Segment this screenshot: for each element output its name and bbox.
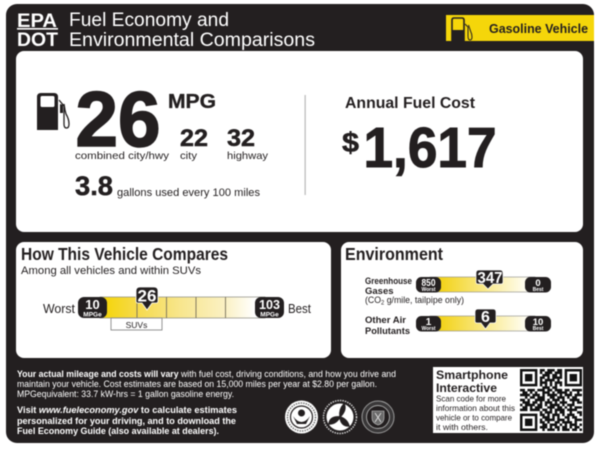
panel: how this vehicle compares xyxy=(16,242,331,358)
worst cap xyxy=(416,316,441,332)
gallons per 100 miles: gallons used every 100 miles xyxy=(117,187,261,199)
best value cap xyxy=(255,297,284,318)
combined MPG xyxy=(75,75,216,163)
footer disclaimer text: MPGequivalent: 33.7 kW-hrs = 1 gallon gasoline energy. xyxy=(17,389,234,399)
greenhouse gas label: Greenhouse xyxy=(365,276,412,287)
best cap: 0 xyxy=(535,278,541,289)
best label: Best xyxy=(288,301,311,316)
EPA DOT logo: DOT xyxy=(17,29,58,51)
EPA DOT logo: EPA xyxy=(17,10,57,32)
footer website text: Fuel Economy Guide (also available at dealers). xyxy=(17,426,219,437)
instructions xyxy=(436,394,516,432)
heading: Smartphone xyxy=(436,368,508,382)
greenhouse gas rating bar xyxy=(416,270,551,293)
annual fuel cost: $ xyxy=(342,127,359,158)
gallons per 100 miles xyxy=(75,171,261,201)
marker xyxy=(136,286,158,310)
worst cap: Worst xyxy=(421,326,436,332)
other air pollutants label xyxy=(365,315,410,337)
best cap xyxy=(525,316,551,332)
other air pollutants label: Pollutants xyxy=(365,326,410,337)
other air pollutants label: Other Air xyxy=(365,315,406,326)
smartphone interactive box xyxy=(433,367,583,433)
worst label: Worst xyxy=(43,301,75,316)
panel: environment xyxy=(341,242,583,358)
icon: EPA seal xyxy=(285,400,318,434)
instructions: information about this xyxy=(436,403,516,413)
best cap: 10 xyxy=(533,317,543,328)
instructions: Scan code for more xyxy=(436,394,506,404)
SUVs range box xyxy=(111,318,162,330)
footer disclaimer text: Your actual mileage and costs will vary with fuel cost, driving conditions, and how you drive and xyxy=(17,369,396,379)
marker: 347 xyxy=(478,270,503,287)
marker: 26 xyxy=(138,286,156,306)
footer website text: Visit www.fueleconomy.gov to calculate estimates xyxy=(17,405,237,416)
highway MPG xyxy=(227,125,269,162)
title: Fuel Economy and xyxy=(69,10,229,31)
greenhouse gas label: g/mile, tailpipe only) xyxy=(384,295,464,305)
combined MPG: 26 xyxy=(76,75,160,163)
greenhouse gas label: Gases xyxy=(365,286,394,297)
footer website text xyxy=(17,405,237,437)
combined MPG: MPG xyxy=(168,91,216,113)
instructions: vehicle or to compare xyxy=(436,412,512,422)
marker: 6 xyxy=(481,309,490,326)
icon: fuel pump xyxy=(37,93,69,130)
best cap: Best xyxy=(533,326,544,332)
subheading: Among all vehicles and within SUVs xyxy=(21,265,202,277)
heading: Interactive xyxy=(436,381,497,395)
greenhouse gas label: 2 xyxy=(381,300,385,306)
combined MPG: combined city/hwy xyxy=(75,150,170,162)
best value cap: 103 xyxy=(259,297,280,312)
comparison bar xyxy=(78,286,284,318)
greenhouse gas label: (CO xyxy=(365,295,382,305)
footer website text: personalized for your driving, and to download the xyxy=(17,416,236,427)
instructions: it with others. xyxy=(436,422,488,432)
best cap: Best xyxy=(533,287,544,293)
highway MPG: highway xyxy=(227,150,269,162)
title: Environmental Comparisons xyxy=(69,30,315,51)
annual fuel cost xyxy=(342,95,496,180)
EPA DOT logo xyxy=(17,10,58,51)
icon: DOE seal xyxy=(362,401,394,433)
SUVs range box: SUVs xyxy=(126,320,147,330)
vehicle type tag: Gasoline Vehicle xyxy=(489,22,588,36)
panel: fuel economy xyxy=(16,51,583,232)
worst cap: Worst xyxy=(421,287,436,293)
worst cap: 850 xyxy=(422,278,436,289)
annual fuel cost: Annual Fuel Cost xyxy=(345,95,475,112)
worst value cap: MPGe xyxy=(83,312,102,318)
worst cap xyxy=(416,277,441,293)
footer disclaimer text xyxy=(17,369,396,399)
annual fuel cost: 1,617 xyxy=(364,116,496,180)
worst cap: 1 xyxy=(426,317,432,328)
icon: DOT seal xyxy=(324,400,356,434)
gallons per 100 miles: 3.8 xyxy=(75,171,113,201)
heading: Environment xyxy=(345,244,443,264)
icon: fuel pump small xyxy=(452,18,472,41)
QR code xyxy=(520,370,582,430)
worst value cap xyxy=(78,297,107,318)
footer disclaimer text: maintain your vehicle. Cost estimates are based on 15,000 miles per year at $2.80 per gallon. xyxy=(17,379,377,389)
city MPG: city xyxy=(180,150,198,162)
title xyxy=(69,10,315,51)
header xyxy=(17,10,594,51)
vehicle type tag xyxy=(446,15,594,41)
city MPG: 22 xyxy=(180,125,208,152)
heading xyxy=(436,368,508,395)
other air pollutants rating bar xyxy=(416,309,551,332)
best value cap: MPGe xyxy=(260,312,279,318)
highway MPG: 32 xyxy=(227,125,255,152)
best cap xyxy=(525,277,551,293)
greenhouse gas label xyxy=(365,276,464,306)
heading: How This Vehicle Compares xyxy=(21,244,228,264)
worst value cap: 10 xyxy=(85,297,100,312)
city MPG xyxy=(180,125,208,162)
